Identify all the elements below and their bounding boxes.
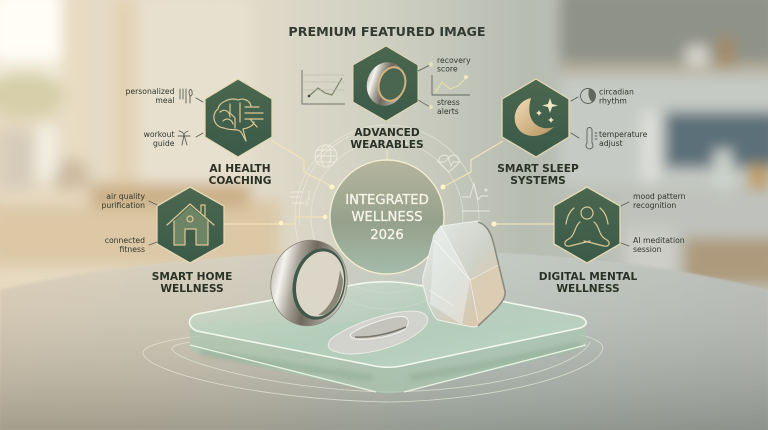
hub label: WELLNESS: [351, 210, 423, 225]
panel: advanced wearables: [302, 46, 471, 151]
heading: SMART HOME: [152, 271, 232, 283]
hologram base rings: [143, 335, 603, 402]
heading: COACHING: [209, 175, 271, 187]
panel: smart sleep systems: [497, 79, 648, 187]
skin patch device: [328, 311, 428, 354]
heading: SMART SLEEP: [497, 163, 579, 175]
crystal gem device: [423, 221, 505, 327]
heading: ADVANCED: [354, 127, 420, 139]
callouts: guide: [153, 139, 175, 148]
callouts: mood pattern: [633, 192, 686, 201]
icon: stars: [536, 98, 558, 123]
heading: SYSTEMS: [510, 175, 566, 187]
heading: WEARABLES: [350, 139, 424, 151]
callouts: recovery: [437, 56, 471, 65]
callouts: stress: [437, 98, 460, 107]
callouts: circadian: [599, 88, 634, 96]
panel: AI health coaching: [126, 79, 272, 187]
hub label: 2026: [370, 228, 404, 243]
callouts: fitness: [120, 245, 145, 254]
callouts: adjust: [599, 139, 623, 148]
connectors: [224, 140, 554, 226]
heading: AI HEALTH: [209, 163, 271, 175]
callouts: purification: [101, 201, 145, 210]
icon: ring: [361, 57, 411, 111]
callouts: recognition: [633, 201, 676, 210]
smart ring device: [263, 233, 355, 333]
callouts: rhythm: [599, 96, 627, 106]
faint hub icons: [290, 145, 490, 211]
heading: DIGITAL MENTAL: [539, 271, 637, 283]
heading: WELLNESS: [160, 283, 224, 295]
callouts: score: [437, 64, 458, 74]
central hub rings: [295, 125, 479, 309]
callouts: connected: [105, 236, 145, 245]
callouts: [418, 56, 471, 116]
hub label: INTEGRATED: [345, 193, 429, 208]
callouts: meal: [155, 96, 174, 105]
icon: meditation figure: [565, 207, 609, 246]
heading: WELLNESS: [556, 283, 620, 295]
callouts: workout: [144, 130, 174, 139]
table surface: [0, 250, 768, 430]
callouts: personalized: [126, 87, 175, 96]
callouts: air quality: [106, 192, 145, 201]
glass platform: [190, 282, 586, 393]
callouts: AI meditation: [633, 236, 685, 245]
icon: house: [174, 206, 208, 245]
panel: smart home wellness: [101, 187, 232, 295]
icon: brain: [214, 99, 263, 141]
callouts: alerts: [437, 107, 459, 116]
icon: moon: [515, 98, 554, 136]
callouts: [571, 88, 648, 149]
callouts: temperature: [599, 130, 648, 139]
title: PREMIUM FEATURED IMAGE: [288, 24, 486, 39]
central hub: [330, 160, 444, 274]
callouts: [126, 87, 203, 148]
callouts: [621, 192, 686, 254]
panel: digital mental wellness: [539, 187, 686, 295]
callouts: [101, 192, 157, 254]
callouts: session: [633, 245, 662, 254]
line chart left: [302, 70, 345, 104]
